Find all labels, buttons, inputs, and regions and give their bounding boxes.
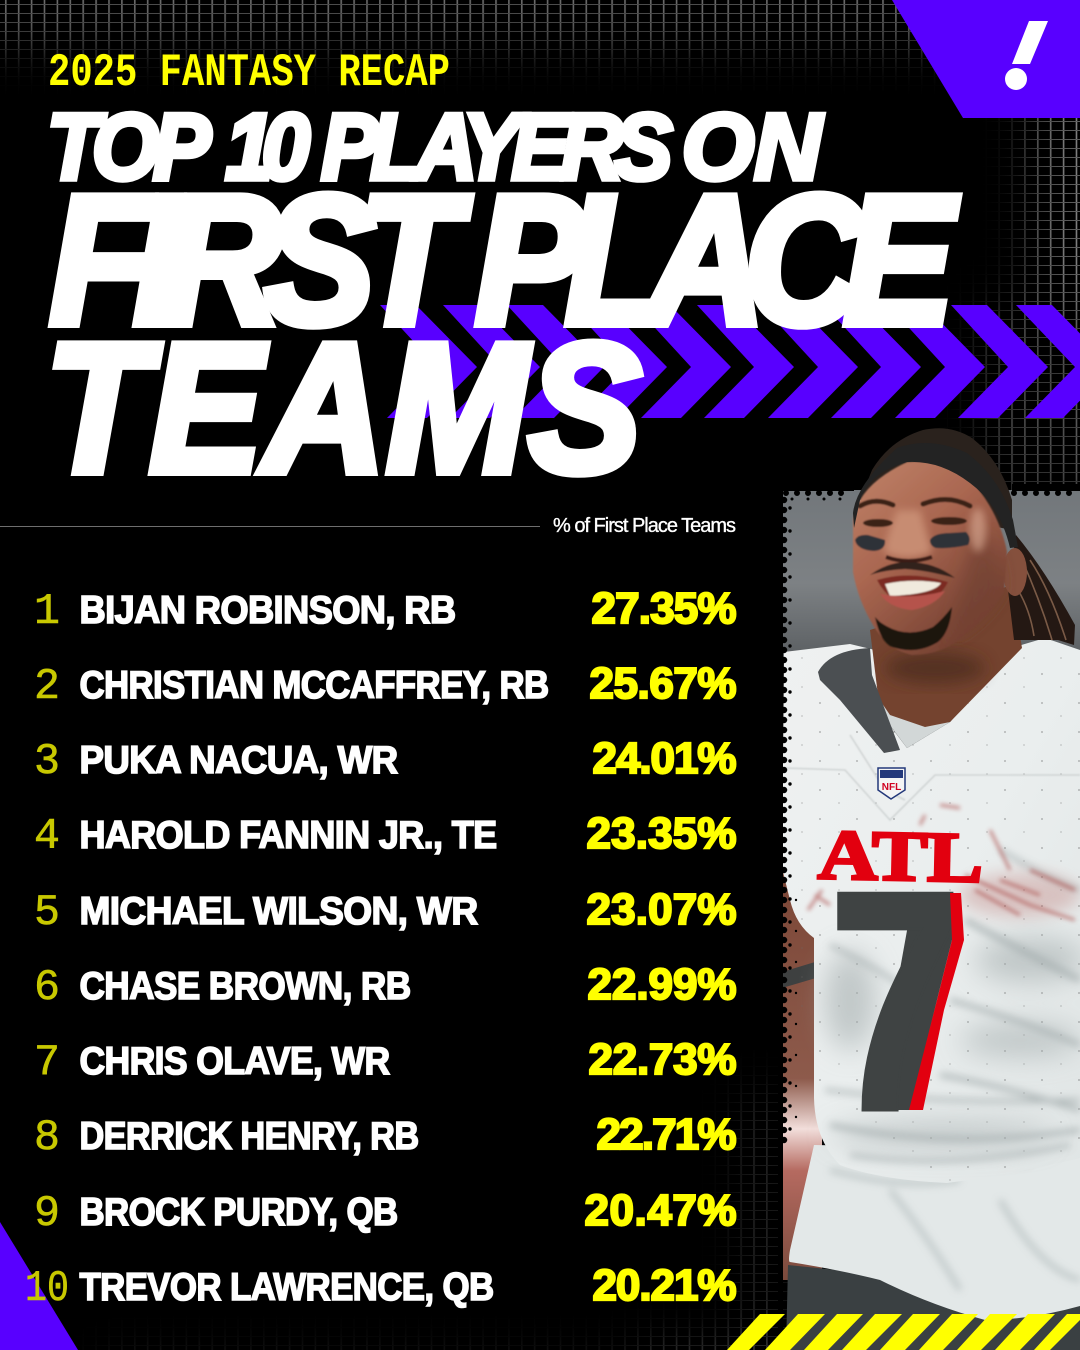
row 5: 23.07% (586, 885, 736, 934)
row 1: 27.35% (592, 584, 736, 633)
shorts folds (830, 1160, 1080, 1290)
undershirt (866, 655, 950, 748)
face (853, 461, 1007, 655)
jersey number stem (872, 893, 952, 1110)
eyebrows (860, 499, 970, 506)
under-chin shadow (885, 652, 985, 684)
corner tab with logo (892, 0, 1080, 118)
title line two: FIRST (50, 158, 471, 363)
hazard stripes (727, 1314, 1080, 1350)
row 3: 24.01% (592, 734, 736, 783)
eye black right (930, 532, 970, 548)
jersey speckle (782, 650, 1080, 1183)
row 6 (34, 960, 736, 1013)
title line two: PLACE (475, 158, 959, 363)
row 10: 10 (25, 1264, 69, 1314)
title line three: TEAMS (45, 306, 641, 511)
row 4 (34, 809, 736, 862)
row 8: 8 (34, 1113, 60, 1163)
player photo (778, 428, 1080, 1350)
moustache (870, 562, 955, 578)
shorts (789, 1145, 1080, 1320)
row 5 (34, 885, 736, 938)
row 3: PUKA NACUA, WR (80, 739, 398, 782)
neck (870, 585, 1022, 735)
title line one: 10 (225, 95, 310, 200)
row 6: 6 (34, 963, 60, 1013)
row 8 (34, 1110, 736, 1163)
row 7: 7 (34, 1038, 60, 1088)
row 1: 1 (34, 587, 60, 637)
row 10: TREVOR LAWRENCE, QB (80, 1266, 494, 1309)
row 3 (34, 734, 736, 787)
row 7 (34, 1035, 736, 1088)
blood stain haze (960, 873, 1080, 917)
shoulder strap (818, 648, 900, 753)
ranking table (25, 584, 736, 1314)
face shading (950, 530, 1002, 640)
goatee (875, 607, 952, 650)
eyes (863, 517, 967, 527)
nostrils (886, 557, 932, 561)
cheek highlight (970, 508, 986, 552)
lower lip (880, 591, 945, 610)
jersey number seven: 7 (828, 825, 963, 1177)
teeth (885, 581, 941, 596)
number red trim (909, 893, 964, 1110)
photo backdrop (782, 490, 1080, 660)
NFL shield: NFL (882, 782, 901, 793)
row 5: MICHAEL WILSON, WR (80, 890, 478, 933)
logo exclamation (1005, 21, 1048, 90)
jersey body (782, 638, 1080, 1183)
bottom-left purple triangle (0, 1222, 78, 1350)
collar seams (785, 735, 1080, 820)
halftone edge top (782, 484, 1080, 499)
kicker heading: 2025 FANTASY RECAP (48, 47, 450, 99)
row 4: 4 (34, 812, 60, 862)
row 7: CHRIS OLAVE, WR (80, 1040, 390, 1083)
row 9: BROCK PURDY, QB (80, 1191, 398, 1234)
row 4: 23.35% (586, 809, 736, 858)
nose (884, 510, 932, 558)
row 1 (34, 584, 736, 637)
eye black left (855, 535, 885, 551)
row 10: 20.21% (592, 1261, 736, 1310)
row 9: 9 (34, 1189, 60, 1239)
row 9: 20.47% (584, 1186, 736, 1235)
row 3: 3 (34, 737, 60, 787)
jersey folds (825, 850, 1080, 1161)
row 6: CHASE BROWN, RB (80, 965, 410, 1008)
row 2: 25.67% (590, 659, 736, 708)
row 6: 22.99% (588, 960, 736, 1009)
halftone edge left (778, 486, 796, 1350)
jersey broad shading (824, 938, 1080, 1147)
face group (853, 461, 1007, 655)
main title (45, 95, 959, 511)
row 2: CHRISTIAN MCCAFFREY, RB (80, 664, 548, 707)
jersey lettering ATL: ATL (817, 816, 984, 898)
column heading: % of First Place Teams (553, 515, 736, 537)
row 7: 22.73% (588, 1035, 736, 1084)
dark pants (786, 1265, 1080, 1350)
dreadlocks (1008, 535, 1075, 645)
row 1: BIJAN ROBINSON, RB (80, 589, 456, 632)
headband (853, 443, 1018, 548)
column rule (0, 526, 540, 527)
row 9 (34, 1186, 736, 1239)
purple chevron band (380, 305, 1080, 418)
ear (1003, 548, 1027, 596)
left arm (782, 860, 822, 1280)
arm band (782, 962, 816, 988)
row 5: 5 (34, 888, 60, 938)
row 2 (34, 659, 736, 712)
mouth (877, 575, 948, 606)
row 2: 2 (34, 662, 60, 712)
hair (860, 428, 1012, 530)
row 8: DERRICK HENRY, RB (80, 1115, 418, 1158)
row 4: HAROLD FANNIN JR., TE (80, 814, 496, 857)
NFL shield (878, 768, 905, 799)
row 8: 22.71% (596, 1110, 736, 1159)
title line one: ON (682, 95, 823, 200)
row 10 (25, 1261, 736, 1314)
blood smears (808, 805, 1075, 920)
title line one: PLAYERS (321, 95, 673, 200)
title line one: TOP (47, 95, 211, 200)
